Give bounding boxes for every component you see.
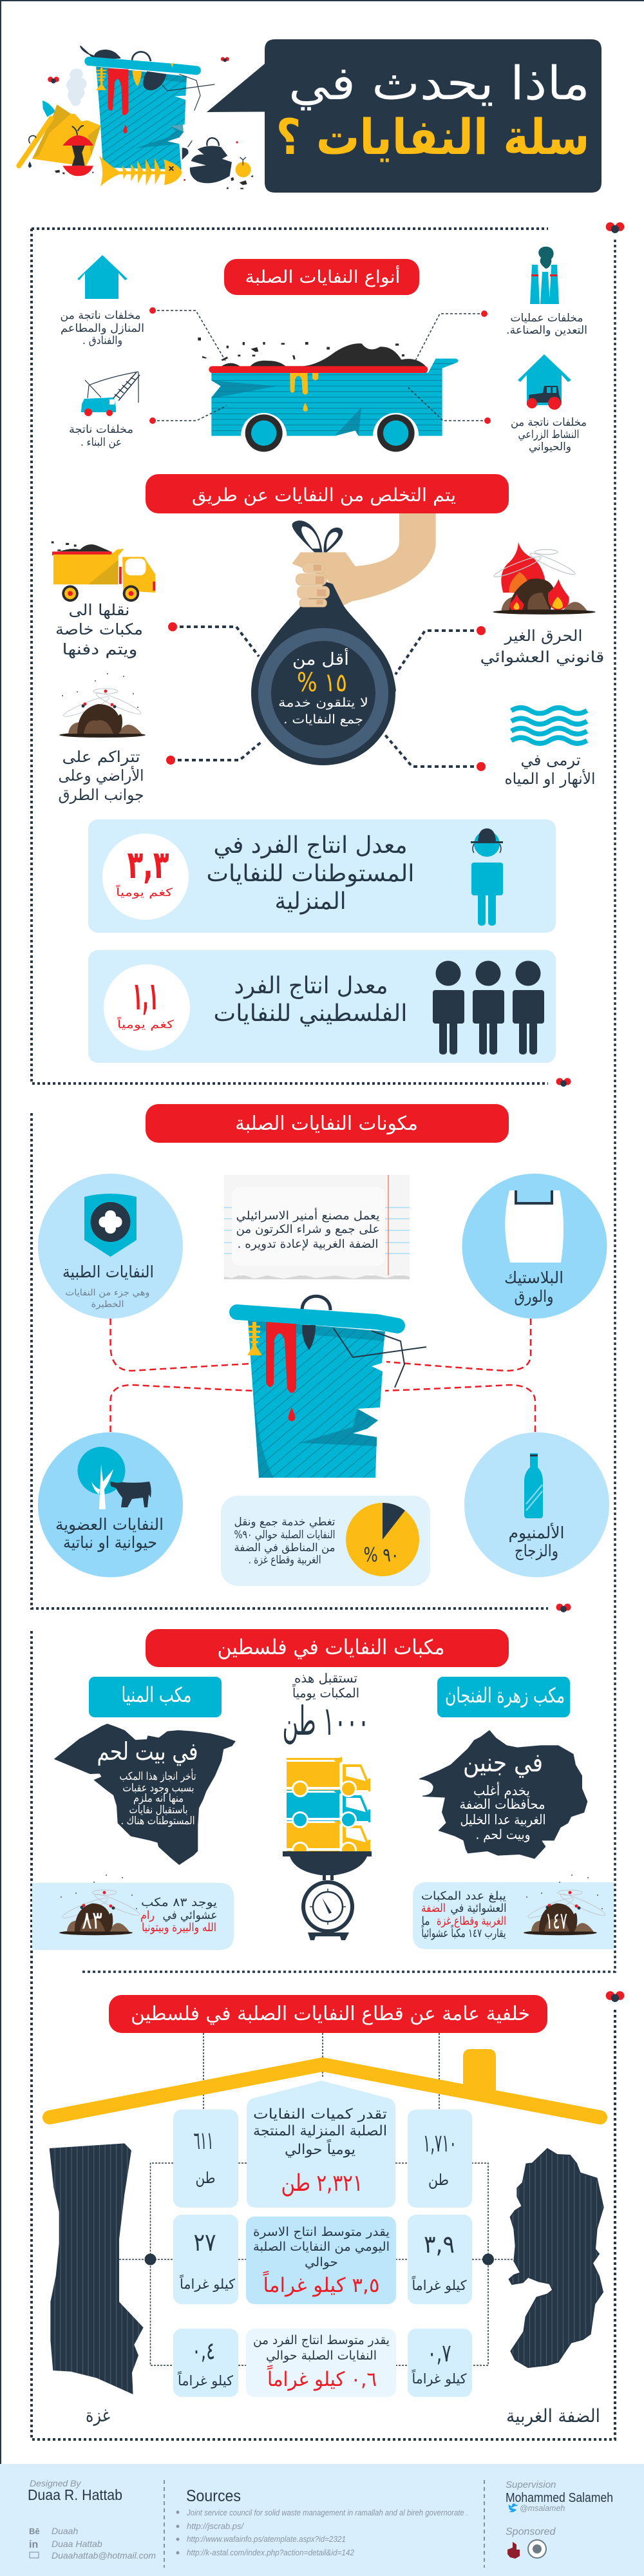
supervision credit: Mohammed Salameh	[506, 2491, 613, 2505]
box: family average: ٣,٥ كيلو غراماً	[263, 2271, 380, 2297]
coverage text: من المناطق في الضفة	[234, 1541, 335, 1554]
truck body	[211, 359, 459, 436]
heading: types of solid waste: أنواع النفايات الصلبة	[245, 265, 401, 287]
text: these landfills receive daily: تستقبل هذه	[294, 1670, 357, 1686]
text: household waste: المنازل والمطاعم	[61, 322, 144, 335]
text: transport to landfills: مكبات خاصة	[55, 620, 143, 638]
label: والورق	[514, 1287, 554, 1306]
sources heading: Sources	[186, 2487, 241, 2505]
supervision credit	[506, 2479, 613, 2513]
three figures	[433, 961, 544, 1054]
box: West Bank tons	[408, 2110, 472, 2208]
mound number: ٨٣	[82, 1906, 102, 1934]
right frame line	[82, 240, 615, 1972]
line 4: يقارب ١٤٧ مكباً عشوائياً	[421, 1925, 506, 1940]
truck bottom	[285, 1818, 370, 1858]
box: individual average: يقدر متوسط انتاج الفرد من	[253, 2333, 390, 2347]
sponsored: Sponsored	[506, 2526, 556, 2537]
text: dumped in rivers: الأنهار او المياه	[505, 769, 595, 788]
box: Gaza family kg: كيلو غراماً	[180, 2274, 235, 2292]
panel text: معدل انتاج الفرد في	[214, 832, 407, 859]
bin tear shadow	[135, 124, 184, 148]
icon: farm house with tractor	[518, 354, 571, 410]
text: construction waste	[69, 423, 133, 449]
scale	[283, 1851, 372, 1940]
map: Bethlehem	[55, 1724, 235, 1864]
label: Gaza: غزة	[86, 2405, 110, 2426]
lid handle	[132, 52, 151, 61]
sources list	[176, 2508, 468, 2557]
text: household waste	[61, 309, 144, 347]
icon: water waves	[511, 708, 587, 743]
text: transport to landfills	[55, 601, 143, 658]
line 3 red: الغربية وقطاع غزة	[437, 1914, 506, 1928]
icon: waste mound with flies	[59, 673, 146, 738]
body shading	[248, 1320, 385, 1341]
heading: overview: خلفية عامة عن قطاع النفايات الصلبة في فلسطين	[131, 2003, 530, 2025]
red dashed connectors	[111, 1319, 535, 1432]
panel: Palestinian per-capita waste	[88, 950, 556, 1063]
box: West Bank family kg: ٣,٩	[424, 2230, 455, 2258]
heading: types of solid waste	[224, 259, 419, 295]
section frame 1	[32, 229, 548, 1083]
label: Al-Minya landfill: مكب المنيا	[121, 1683, 192, 1707]
box: West Bank individual kg: كيلو غراماً	[412, 2369, 466, 2387]
text: mining and industry waste: مخلفات عمليات	[510, 312, 583, 325]
heading: overview	[109, 1995, 547, 2033]
description: منها انه ملزم	[133, 1792, 184, 1805]
bucket handle	[19, 119, 51, 166]
paper lines	[224, 1207, 410, 1254]
stat unit: كغم يومياً	[115, 884, 173, 899]
coverage text: الغربية وقطاع غزة .	[249, 1554, 321, 1567]
settler figure	[471, 828, 503, 926]
sources list: Joint service council for solid waste management in ramallah and al bireh governorate .	[186, 2508, 468, 2517]
stat value: ٣,٣	[128, 843, 169, 888]
box: West Bank tons: ١,٧١٠	[423, 2129, 457, 2157]
small fish bone	[96, 68, 106, 90]
smoke puff	[66, 69, 87, 106]
text: do not receive: لا يتلقون خدمة	[278, 696, 368, 710]
panel: Palestinian per-capita waste: ١,١	[133, 974, 158, 1019]
leader dots	[149, 307, 491, 424]
apple core	[62, 126, 93, 176]
box: Gaza family kg	[173, 2215, 238, 2304]
text: accumulates on roads	[58, 748, 144, 804]
box: Gaza tons	[173, 2110, 238, 2208]
text: agricultural waste: النشاط الزراعي	[518, 428, 580, 441]
pie chart	[346, 1503, 419, 1576]
note text	[236, 1208, 380, 1251]
body tear shading lower	[335, 408, 361, 436]
fly	[48, 77, 59, 83]
illustration: hand holding bag	[251, 512, 436, 765]
rat on the lid	[80, 46, 120, 59]
bin body	[96, 66, 187, 169]
white stat circle	[104, 964, 190, 1051]
text: household waste: والفنادق .	[82, 334, 122, 347]
text line 2: عشوائي في	[162, 1909, 218, 1922]
footer dividers	[164, 2480, 484, 2568]
map: Jenin	[420, 1731, 587, 1858]
bug behind bag	[182, 140, 192, 159]
note paper	[224, 1175, 410, 1279]
heading: disposal methods	[146, 474, 509, 513]
box: West Bank individual kg	[408, 2329, 472, 2397]
contact list: Duaa Hattab	[52, 2539, 102, 2549]
forearm and palm	[292, 512, 436, 606]
yellow apple	[236, 157, 251, 177]
heading: landfills in Palestine: مكبات النفايات في فلسطين	[218, 1635, 444, 1659]
debris	[55, 170, 253, 189]
icon: factory	[530, 247, 559, 304]
description: باستقبال نفايات	[129, 1804, 188, 1817]
label: النفايات العضوية	[55, 1515, 164, 1534]
text: accumulates on roads: تتراكم على	[62, 748, 140, 766]
sources list: http://www.wafainfo.ps/atemplate.aspx?id=2321	[187, 2534, 346, 2544]
description: تأخر انجاز هذا المكب	[120, 1768, 196, 1783]
fly marker top right	[606, 222, 624, 233]
label	[55, 1515, 164, 1552]
box: total household waste	[247, 2081, 395, 2208]
label: Zahrat Al-Finjan landfill	[437, 1677, 570, 1717]
note text: الضفة الغربية لإعادة تدويره .	[237, 1237, 379, 1251]
description: محافظات الضفة	[460, 1797, 545, 1812]
white stat circle	[102, 834, 189, 920]
stat unit: كغم يومياً	[117, 1016, 175, 1031]
bag center	[271, 641, 375, 745]
sources list: http://jscrab.ps/	[187, 2521, 245, 2531]
red drop	[123, 124, 128, 133]
left body shading	[253, 1385, 274, 1478]
illustration: overflowing trash can	[19, 46, 253, 189]
text: dumped in rivers	[505, 751, 595, 788]
stack of trucks on a scale	[283, 1757, 372, 1940]
description	[120, 1768, 196, 1827]
pie chart: ٩٠ %	[363, 1544, 399, 1567]
heading: solid waste components: مكونات النفايات الصلبة	[235, 1112, 418, 1135]
coverage text	[234, 1516, 336, 1567]
paper sheet	[224, 1175, 410, 1279]
line 2 red: الضفة	[421, 1902, 446, 1915]
contact list	[52, 2526, 156, 2561]
box: family average: يقدر متوسط انتاج الاسرة	[253, 2225, 390, 2239]
text: construction waste: مخلفات ناتجة	[69, 423, 133, 436]
contact icons: Bē	[29, 2526, 40, 2536]
red drip	[266, 1322, 296, 1393]
truck top	[285, 1757, 370, 1797]
text: illegal random burning: قانوني العشوائي	[480, 648, 604, 666]
text: illegal random burning	[480, 627, 604, 666]
circle: aluminium and glass	[464, 1433, 609, 1577]
wheels	[245, 414, 415, 452]
designer credit: Duaa R. Hattab	[28, 2486, 122, 2503]
leaders from heading	[204, 2033, 439, 2110]
text: waste collection: جمع النفايات .	[283, 712, 363, 727]
circle: medical waste	[38, 1174, 183, 1319]
fingers	[296, 562, 330, 607]
text line 2 red: رام	[140, 1909, 155, 1922]
text: less than: أقل من	[292, 647, 349, 669]
panel: random dumps in West Bank and Gaza	[413, 1875, 614, 1949]
box: Gaza tons: ٦١١	[193, 2126, 214, 2155]
red drop	[289, 1407, 295, 1421]
yellow drips	[290, 372, 318, 412]
icon: dump truck	[52, 541, 155, 602]
text: agricultural waste: والحيواني	[529, 441, 571, 453]
yellow drop	[133, 71, 142, 86]
fly marker frame 2	[556, 1604, 571, 1612]
tear shading	[299, 1409, 378, 1446]
description: الغربية عدا الخليل	[460, 1812, 546, 1827]
box: West Bank family kg	[408, 2215, 472, 2304]
contact icons: in	[29, 2539, 38, 2550]
paper margin	[388, 1175, 389, 1275]
contact list: Duaah	[52, 2526, 78, 2536]
panel text	[206, 832, 415, 915]
text: household waste: مخلفات ناتجة من	[61, 309, 140, 322]
title line 2: سلة النفايات ؟	[276, 108, 590, 166]
note text: على جمع و شراء الكرتون من	[236, 1223, 380, 1236]
panel text: المنزلية	[274, 888, 346, 915]
text: agricultural waste: مخلفات ناتجة من	[511, 416, 587, 429]
wires	[162, 74, 214, 111]
icon: burning waste	[493, 542, 596, 615]
red drip	[108, 68, 128, 115]
big fish skeleton	[99, 156, 182, 186]
sublabel: الخطيرة	[91, 1299, 124, 1310]
dark drop	[302, 1325, 316, 1350]
fly marker frame 3	[606, 1991, 624, 2002]
leader dots around the bag	[166, 622, 486, 771]
debris	[198, 338, 404, 361]
bracket lines	[119, 2163, 513, 2365]
box: West Bank tons: طن	[428, 2171, 449, 2189]
dark bag stuck on the bin	[143, 72, 166, 90]
box: family average	[246, 2217, 396, 2304]
note text: يعمل مصنع أمنير الاسرائيلي	[236, 1208, 380, 1223]
label: Al-Minya landfill	[89, 1677, 222, 1717]
panel: random dumps in Ramallah	[32, 1875, 234, 1950]
text: transport to landfills: ويتم دفنها	[62, 640, 138, 658]
box: Gaza family kg: ٢٧	[193, 2228, 216, 2256]
panel text: المستوطنات للنفايات	[206, 861, 415, 887]
text: transport to landfills: نقلها الى	[68, 601, 130, 619]
supervision credit: Supervision	[506, 2479, 556, 2490]
waste pile	[221, 343, 426, 367]
fly near title	[221, 57, 229, 62]
icon: shield with cross	[84, 1194, 137, 1257]
panel: settlement per-capita waste	[88, 819, 556, 933]
box: Gaza tons: طن	[196, 2169, 215, 2187]
large trash can	[237, 1296, 426, 1478]
icon: tree	[77, 1447, 125, 1509]
text line 1: يوجد ٨٣ مكب	[141, 1896, 217, 1909]
description: المستوطنات هناك .	[121, 1815, 194, 1827]
contact icons	[29, 2526, 40, 2558]
bucket shading	[32, 104, 71, 159]
footer	[0, 2464, 644, 2576]
label: حيوانية او نباتية	[63, 1533, 157, 1552]
handle	[302, 1296, 330, 1310]
sponsored	[506, 2526, 556, 2559]
dotted leaders around the bag	[171, 627, 481, 767]
section frame 3 left	[32, 1631, 615, 2439]
bin shadows	[96, 66, 187, 82]
truck of solid waste	[198, 338, 459, 452]
stat: 1000 tons: ١٠٠٠ طن	[282, 1697, 370, 1744]
text: accumulates on roads: الأراضي وعلى	[58, 766, 144, 785]
designer credit: Designed By	[30, 2478, 81, 2488]
panel text: معدل انتاج الفرد	[234, 973, 388, 999]
fly marker frame 1	[556, 1078, 571, 1087]
text: illegal random burning: الحرق الغير	[504, 627, 582, 645]
panel text	[214, 973, 407, 1027]
description	[460, 1782, 546, 1843]
box: total household waste: الصلبة المنزلية المنتجة	[253, 2123, 387, 2139]
description: وبيت لحم .	[475, 1827, 531, 1843]
heading: disposal methods: يتم التخلص من النفايات عن طريق	[192, 484, 456, 506]
bucket tear shading	[88, 126, 101, 156]
place name: في جنين	[463, 1748, 543, 1778]
sublabel	[66, 1288, 149, 1310]
yellow bucket	[32, 104, 101, 166]
icon: house	[77, 255, 128, 299]
fish bone	[247, 1322, 262, 1355]
title line 1: ماذا يحدث في	[289, 56, 590, 111]
icon: plastic bag	[505, 1190, 564, 1263]
label: Zahrat Al-Finjan landfill: مكب زهرة الفنجان	[445, 1683, 565, 1708]
label: النفايات الطبية	[62, 1263, 154, 1281]
red rim	[209, 366, 428, 373]
inner highlight	[232, 1187, 385, 1266]
box: individual average: النفايات الصلبة حوالي	[266, 2349, 377, 2363]
red specks	[184, 141, 238, 181]
body	[248, 1320, 385, 1478]
tied black bag	[190, 138, 232, 183]
label: والزجاج	[515, 1541, 558, 1561]
box: total household waste: ٢,٣٢١ طن	[281, 2170, 363, 2197]
map: Gaza	[50, 2143, 144, 2394]
lid	[237, 1312, 397, 1326]
description: بسبب وجود عقبات	[122, 1782, 194, 1795]
body tear shading	[211, 381, 277, 398]
place name: في بيت لحم	[97, 1737, 198, 1766]
coverage text: النفايات الصلبة حوالي ٩٠%	[234, 1529, 335, 1541]
lid	[89, 61, 196, 70]
box: family average: اليومي من النفايات الصلبة	[253, 2240, 390, 2254]
box: West Bank family kg: كيلو غراماً	[412, 2275, 466, 2293]
text: these landfills receive daily: المكبات يومياً	[292, 1684, 359, 1701]
text: mining and industry waste	[506, 312, 587, 337]
box: Gaza individual kg: كيلو غراماً	[178, 2371, 233, 2389]
bag ring	[258, 628, 388, 758]
leader lines: truck left and right	[153, 310, 488, 421]
sources list: http://k-astal.com/index.php?action=detail&id=142	[187, 2548, 355, 2557]
text: 15 percent: ١٥ %	[297, 668, 347, 698]
icon: bottle	[524, 1453, 543, 1518]
box: individual average: ٠,٦ كيلو غراماً	[267, 2365, 377, 2391]
text line 3: الله والبيرة وبيتونيا	[142, 1921, 216, 1934]
circle: plastic and paper	[462, 1174, 607, 1319]
label: الألمنيوم	[509, 1522, 564, 1542]
box: individual average	[246, 2329, 396, 2397]
line 2 dark: العشوائية في	[451, 1902, 506, 1915]
box: West Bank individual kg: ٠,٧	[428, 2339, 451, 2367]
label	[504, 1268, 564, 1306]
mound number: ١٤٧	[545, 1908, 567, 1934]
designer credit	[28, 2478, 122, 2503]
heading: landfills in Palestine	[146, 1629, 509, 1667]
text: mining and industry waste: التعدين والصناعة.	[506, 324, 587, 337]
section frame 2	[32, 1113, 548, 1608]
description: يخدم أغلب	[473, 1782, 530, 1798]
heading: solid waste components	[146, 1104, 509, 1143]
contact list: Duaahattab@hotmail.com	[52, 2550, 156, 2561]
small bee on the lid	[171, 63, 173, 68]
wires	[334, 1328, 426, 1388]
panel: 90 percent coverage	[221, 1496, 430, 1586]
house chimney	[463, 2049, 496, 2100]
icon: cow	[110, 1482, 151, 1507]
teal shard	[43, 100, 55, 117]
bucket ring	[29, 136, 36, 144]
circle: organic waste	[38, 1433, 183, 1577]
icon: crane	[81, 372, 140, 416]
icon: mound with flies	[524, 1875, 607, 1935]
coverage text: تغطي خدمة جمع ونقل	[234, 1516, 336, 1529]
box: total household waste: تقدر كميات النفايات	[253, 2106, 387, 2123]
panel text: الفلسطيني للنفايات	[214, 1000, 407, 1027]
supervision credit: @msalameh	[520, 2504, 565, 2513]
text: dumped in rivers: ترمى في	[520, 751, 581, 769]
truck middle	[285, 1788, 370, 1828]
label: West Bank: الضفة الغربية	[506, 2405, 600, 2427]
sublabel: وهي جزء من النفايات	[66, 1288, 149, 1298]
wheel arches	[241, 413, 419, 436]
bracket dots	[144, 2253, 494, 2265]
box: family average: حوالي	[305, 2255, 338, 2269]
text: agricultural waste	[511, 416, 587, 453]
title speech bubble	[207, 39, 601, 193]
box: total household waste: يومياً حوالي	[285, 2139, 355, 2158]
line 3 dark: ما	[421, 1914, 430, 1928]
text: construction waste: عن البناء .	[80, 436, 122, 449]
bag knot and neck	[251, 520, 396, 691]
icon: mound with flies	[59, 1875, 141, 1935]
text: accumulates on roads: جوانب الطرق	[58, 786, 144, 804]
bag body	[251, 621, 395, 765]
box: Gaza individual kg: ٠,٤	[192, 2336, 215, 2365]
dark drop	[28, 162, 32, 167]
paper shadow	[224, 1275, 410, 1279]
house roof	[50, 2065, 600, 2117]
box: Gaza individual kg	[173, 2329, 238, 2397]
text: these landfills receive daily	[292, 1670, 359, 1701]
label	[509, 1522, 564, 1561]
map: West Bank	[509, 2149, 603, 2367]
label: البلاستيك	[504, 1268, 564, 1287]
text lines: يبلغ عدد المكبات	[421, 1889, 506, 1903]
